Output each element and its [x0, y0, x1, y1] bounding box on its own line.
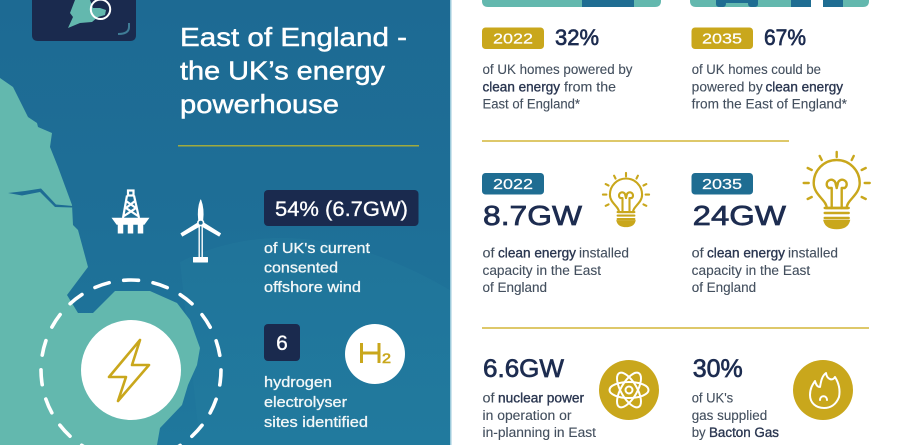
text: 2035 capacity description: capacity in the East: [692, 263, 810, 278]
panel: left blue background: [0, 0, 452, 445]
stat: Bacton gas: Bacton Gas: [709, 425, 779, 440]
stat: 2022 homes 32%: 32%: [555, 25, 599, 50]
text: 2035 homes description: [692, 62, 848, 112]
stat: nuclear power: [482, 355, 596, 440]
text: 2022 capacity description: capacity in the East: [482, 263, 601, 278]
text: 2022 capacity description: of England: [482, 280, 547, 295]
stat: Bacton gas: [692, 355, 779, 440]
text: 2022 capacity description: [482, 246, 629, 295]
text: 2022 capacity description: of: [482, 246, 495, 261]
text: hydrogen sites: sites identified: [264, 415, 368, 431]
title: East of England -: [180, 22, 407, 52]
stat: Bacton gas: 30%: [693, 355, 743, 383]
icon: hydrogen H2: 2: [382, 350, 391, 366]
text: 2022 homes description: clean energy: [482, 80, 560, 94]
stat: 2035 homes 67%: [692, 25, 806, 50]
icon: hydrogen H2: [345, 324, 405, 384]
title: [180, 22, 407, 119]
stat: nuclear power: of: [482, 391, 495, 406]
stat: Bacton gas: of UK's: [692, 391, 733, 406]
text: 2035 homes description: powered by: [692, 80, 763, 94]
stat: 2035 capacity 24GW: 2035: [702, 176, 742, 193]
icon: atom: [599, 360, 659, 420]
icon: wind turbine: [181, 200, 220, 262]
stat: nuclear power: in-planning in East: [482, 425, 596, 440]
panel: top bar right: [690, 0, 869, 7]
text: 2035 capacity description: of England: [692, 280, 756, 295]
text: 2035 homes description: of UK homes could be: [692, 62, 821, 77]
text: 2035 homes description: from the East of England*: [692, 97, 848, 112]
panel: coastline map of East of England: [0, 78, 200, 445]
text: offshore wind: of UK's current: [264, 241, 370, 257]
stat: 2022 capacity 8.7GW: [482, 173, 582, 231]
stat: Bacton gas: gas supplied: [692, 408, 767, 423]
stat: 2022 homes 32%: [482, 25, 599, 50]
panel: top bar left: [482, 0, 661, 7]
text: 2035 capacity description: [692, 246, 838, 295]
icon: lightning bolt in white circle: [81, 320, 181, 420]
text: hydrogen sites: hydrogen: [264, 375, 332, 391]
stat: 2022 capacity 8.7GW: 8.7GW: [483, 200, 582, 231]
text: 2035 capacity description: of: [692, 246, 704, 261]
text: 2035 homes description: clean energy: [766, 80, 843, 94]
title: powerhouse: [180, 89, 339, 119]
text: hydrogen sites: [264, 375, 368, 431]
icon: large light bulb: [804, 152, 870, 228]
text: 2022 homes description: [482, 62, 633, 112]
text: hydrogen sites: electrolyser: [264, 395, 347, 411]
stat: nuclear power: in operation or: [482, 408, 572, 423]
stat: nuclear power: nuclear power: [498, 391, 585, 406]
icon: offshore oil rig: [113, 190, 148, 234]
icon: UK locator map box: [32, 0, 136, 41]
stat: Bacton gas: by: [692, 425, 706, 440]
text: offshore wind: [264, 241, 370, 296]
stat: 2022 homes 32%: 2022: [493, 30, 533, 48]
text: 2022 homes description: from the: [564, 80, 616, 94]
text: offshore wind: offshore wind: [264, 280, 361, 296]
stat: 2035 capacity 24GW: 24GW: [693, 200, 786, 231]
text: 2022 homes description: East of England*: [482, 97, 581, 112]
text: offshore wind: consented: [264, 261, 338, 277]
stat badge: 54% (6.7GW): [264, 190, 418, 226]
stat: 2035 capacity 24GW: [692, 173, 786, 231]
stat: 2022 capacity 8.7GW: 2022: [493, 176, 533, 193]
stat: 2035 homes 67%: 2035: [702, 30, 742, 48]
stat: nuclear power: 6.6GW: [483, 355, 564, 383]
icon: gas flame: [793, 360, 853, 420]
icon: small light bulb: [603, 173, 649, 226]
stat badge: 6: [264, 324, 300, 361]
text: 2022 capacity description: clean energy: [498, 246, 576, 261]
icon: dashed ring: [41, 280, 221, 445]
stat badge: 54% (6.7GW): 54% (6.7GW): [275, 198, 408, 221]
text: 2022 capacity description: installed: [579, 246, 629, 261]
text: 2035 capacity description: clean energy: [707, 246, 785, 261]
stat: 2035 homes 67%: 67%: [764, 25, 806, 50]
title: the UK’s energy: [180, 56, 385, 86]
stat badge: 6: 6: [276, 332, 288, 355]
text: 2022 homes description: of UK homes powered by: [482, 62, 633, 77]
text: 2035 capacity description: installed: [788, 246, 838, 261]
